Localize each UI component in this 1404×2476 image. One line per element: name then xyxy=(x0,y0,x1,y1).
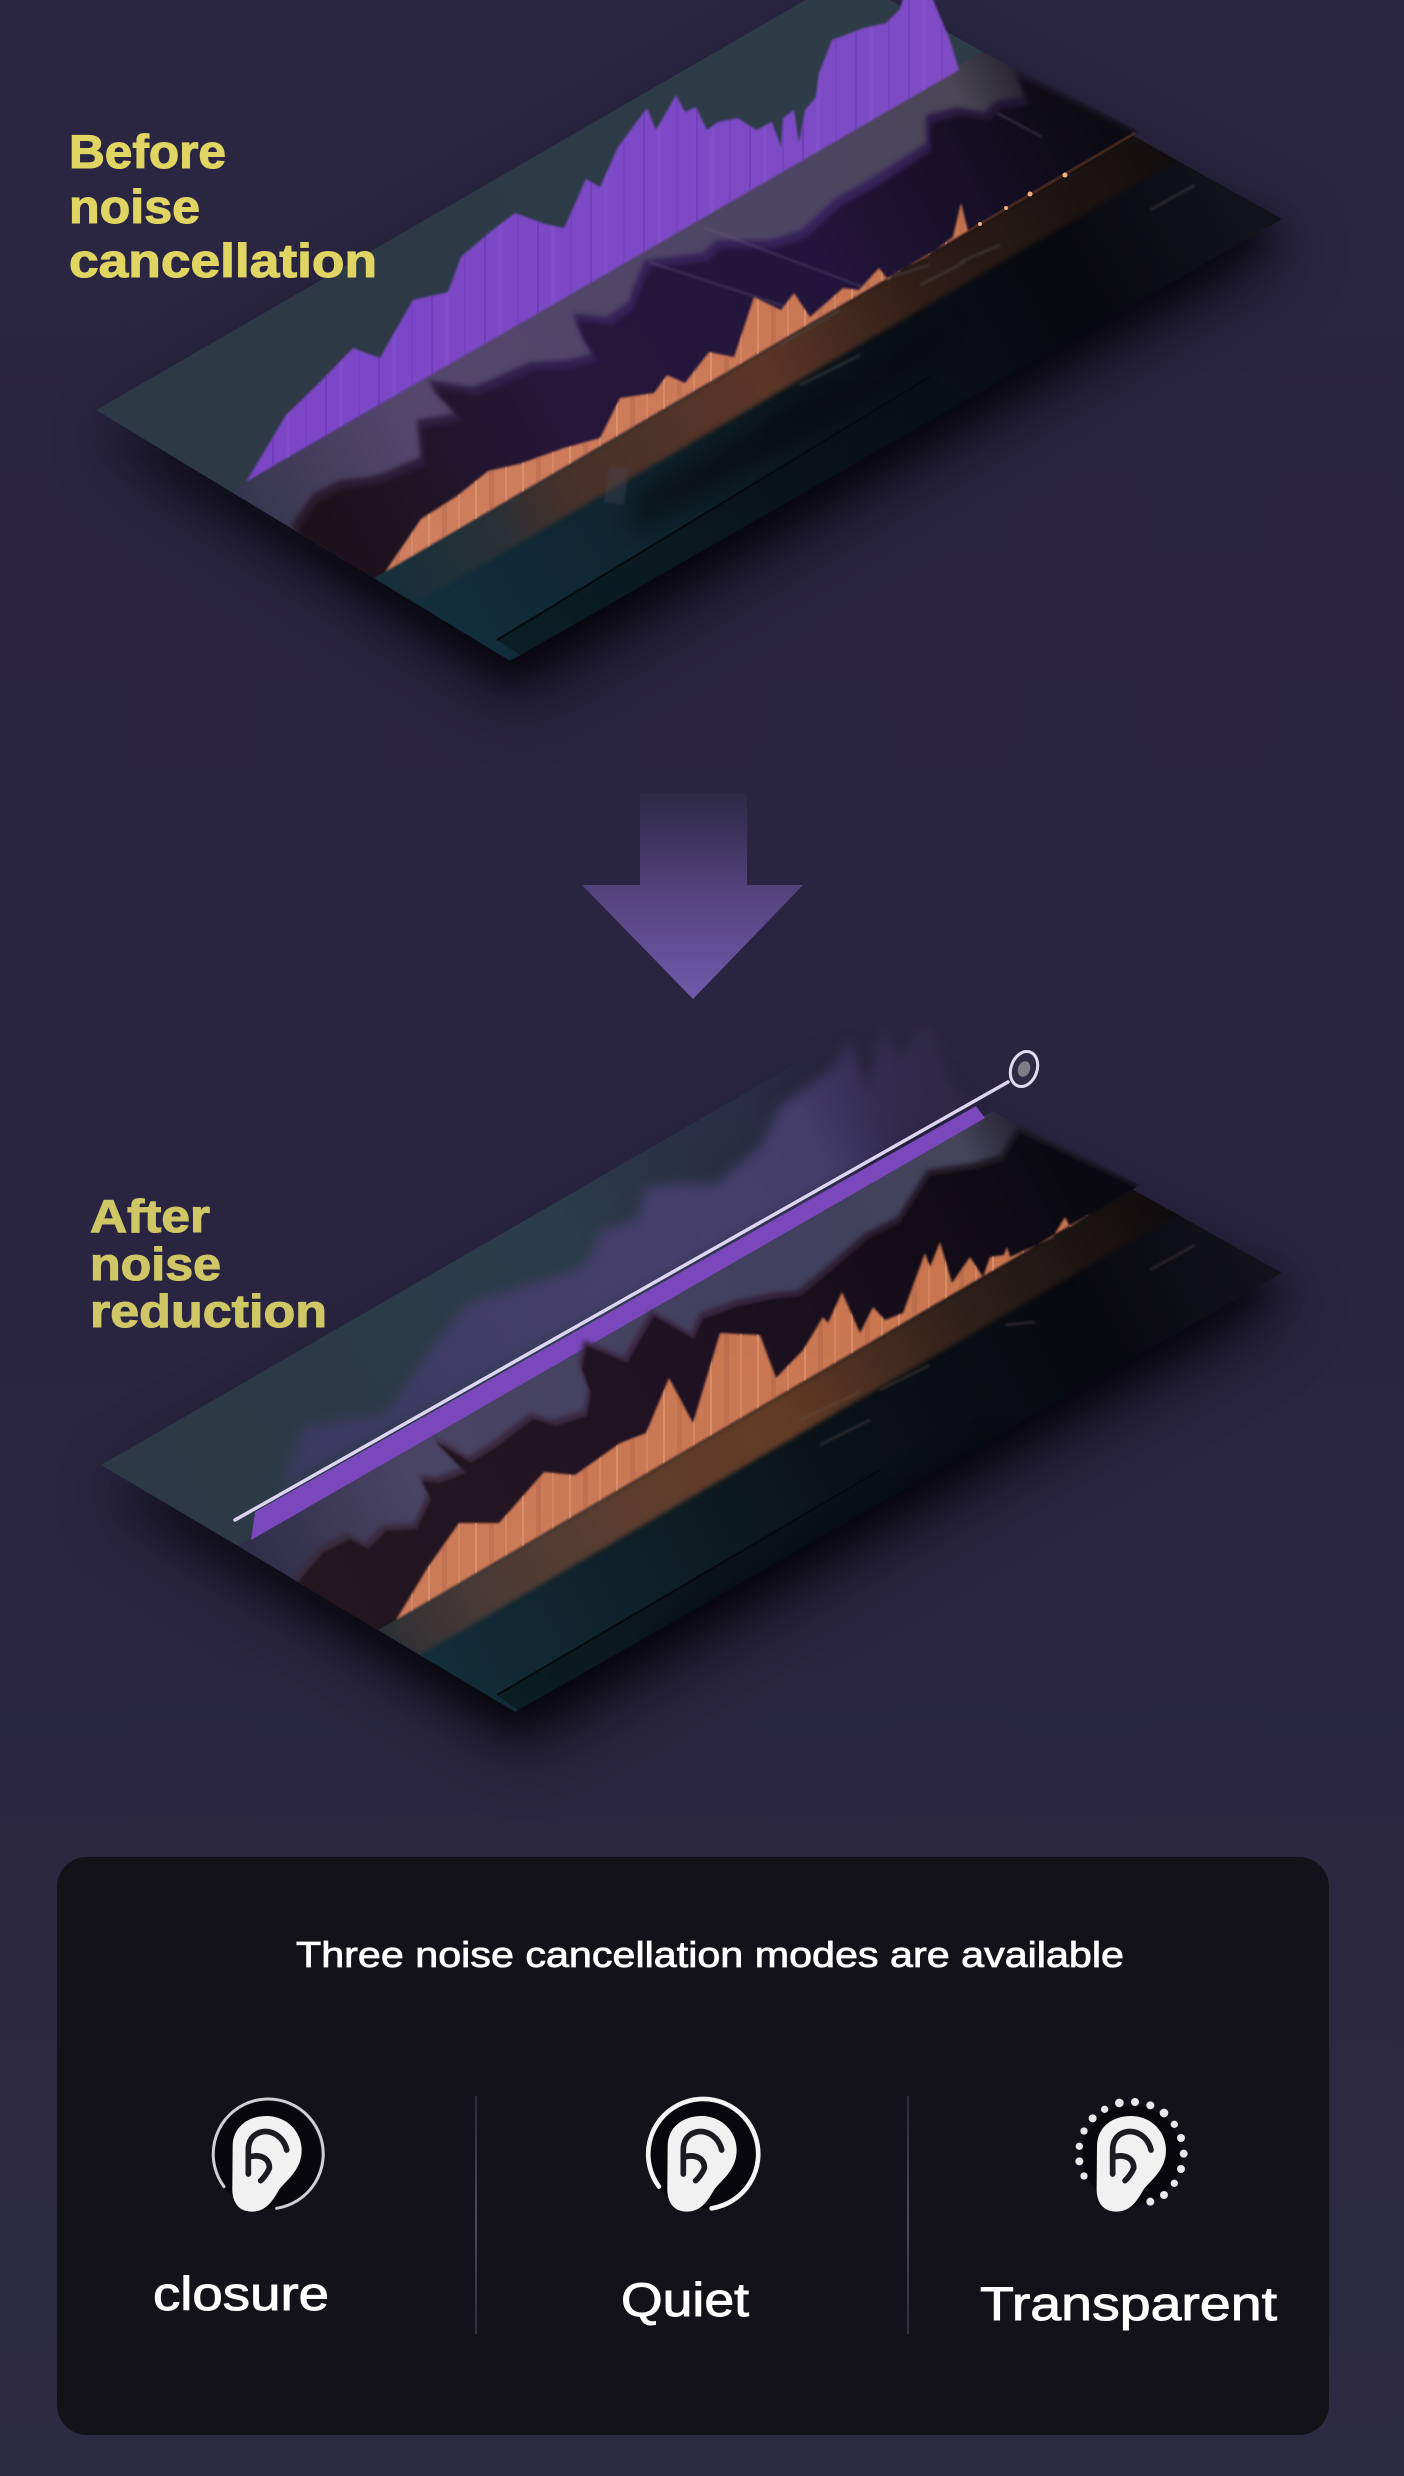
divider left xyxy=(475,2096,477,2334)
plate tight shadow xyxy=(96,219,1282,680)
plate layers xyxy=(96,0,1282,680)
panel: before noise cancellation plate xyxy=(96,0,1290,700)
panel: noise cancellation modes xyxy=(57,1857,1329,2435)
city silhouette xyxy=(291,70,1144,586)
plate layers xyxy=(102,1087,1282,1712)
heading: before noise cancellation xyxy=(69,125,377,287)
white noise line with earpiece xyxy=(235,1048,1042,1520)
plate soft shadow xyxy=(110,30,1290,700)
orange waveform xyxy=(385,1210,1095,1630)
label: transparent: Transparent xyxy=(980,2277,1277,2330)
heading: after noise reduction: noise xyxy=(90,1238,221,1290)
heading: after noise reduction: reduction xyxy=(90,1285,327,1337)
arrow: down xyxy=(582,793,803,999)
purple waveform xyxy=(240,0,965,495)
heading: before noise cancellation: Before xyxy=(69,125,226,178)
heading: before noise cancellation: noise xyxy=(69,180,200,233)
label: closure: closure xyxy=(153,2267,329,2320)
ghost waveform xyxy=(280,1024,976,1490)
icon: closure ear xyxy=(213,2099,323,2212)
icon: quiet ear xyxy=(648,2099,758,2212)
heading: after noise reduction: After xyxy=(90,1190,210,1242)
plate soft shadow xyxy=(115,1100,1290,1752)
flat purple band xyxy=(251,1106,985,1540)
panel heading: Three noise cancellation modes are available xyxy=(296,1934,1124,1975)
label: quiet: Quiet xyxy=(621,2273,749,2326)
icon: transparent ear xyxy=(1075,2098,1188,2212)
city silhouette xyxy=(294,1127,1143,1636)
divider right xyxy=(907,2096,909,2334)
panel: after noise reduction plate xyxy=(101,1024,1290,1752)
heading: after noise reduction xyxy=(90,1190,327,1337)
orange waveform xyxy=(380,133,1135,580)
plate tight shadow xyxy=(101,1273,1282,1730)
heading: before noise cancellation: cancellation xyxy=(69,234,377,287)
